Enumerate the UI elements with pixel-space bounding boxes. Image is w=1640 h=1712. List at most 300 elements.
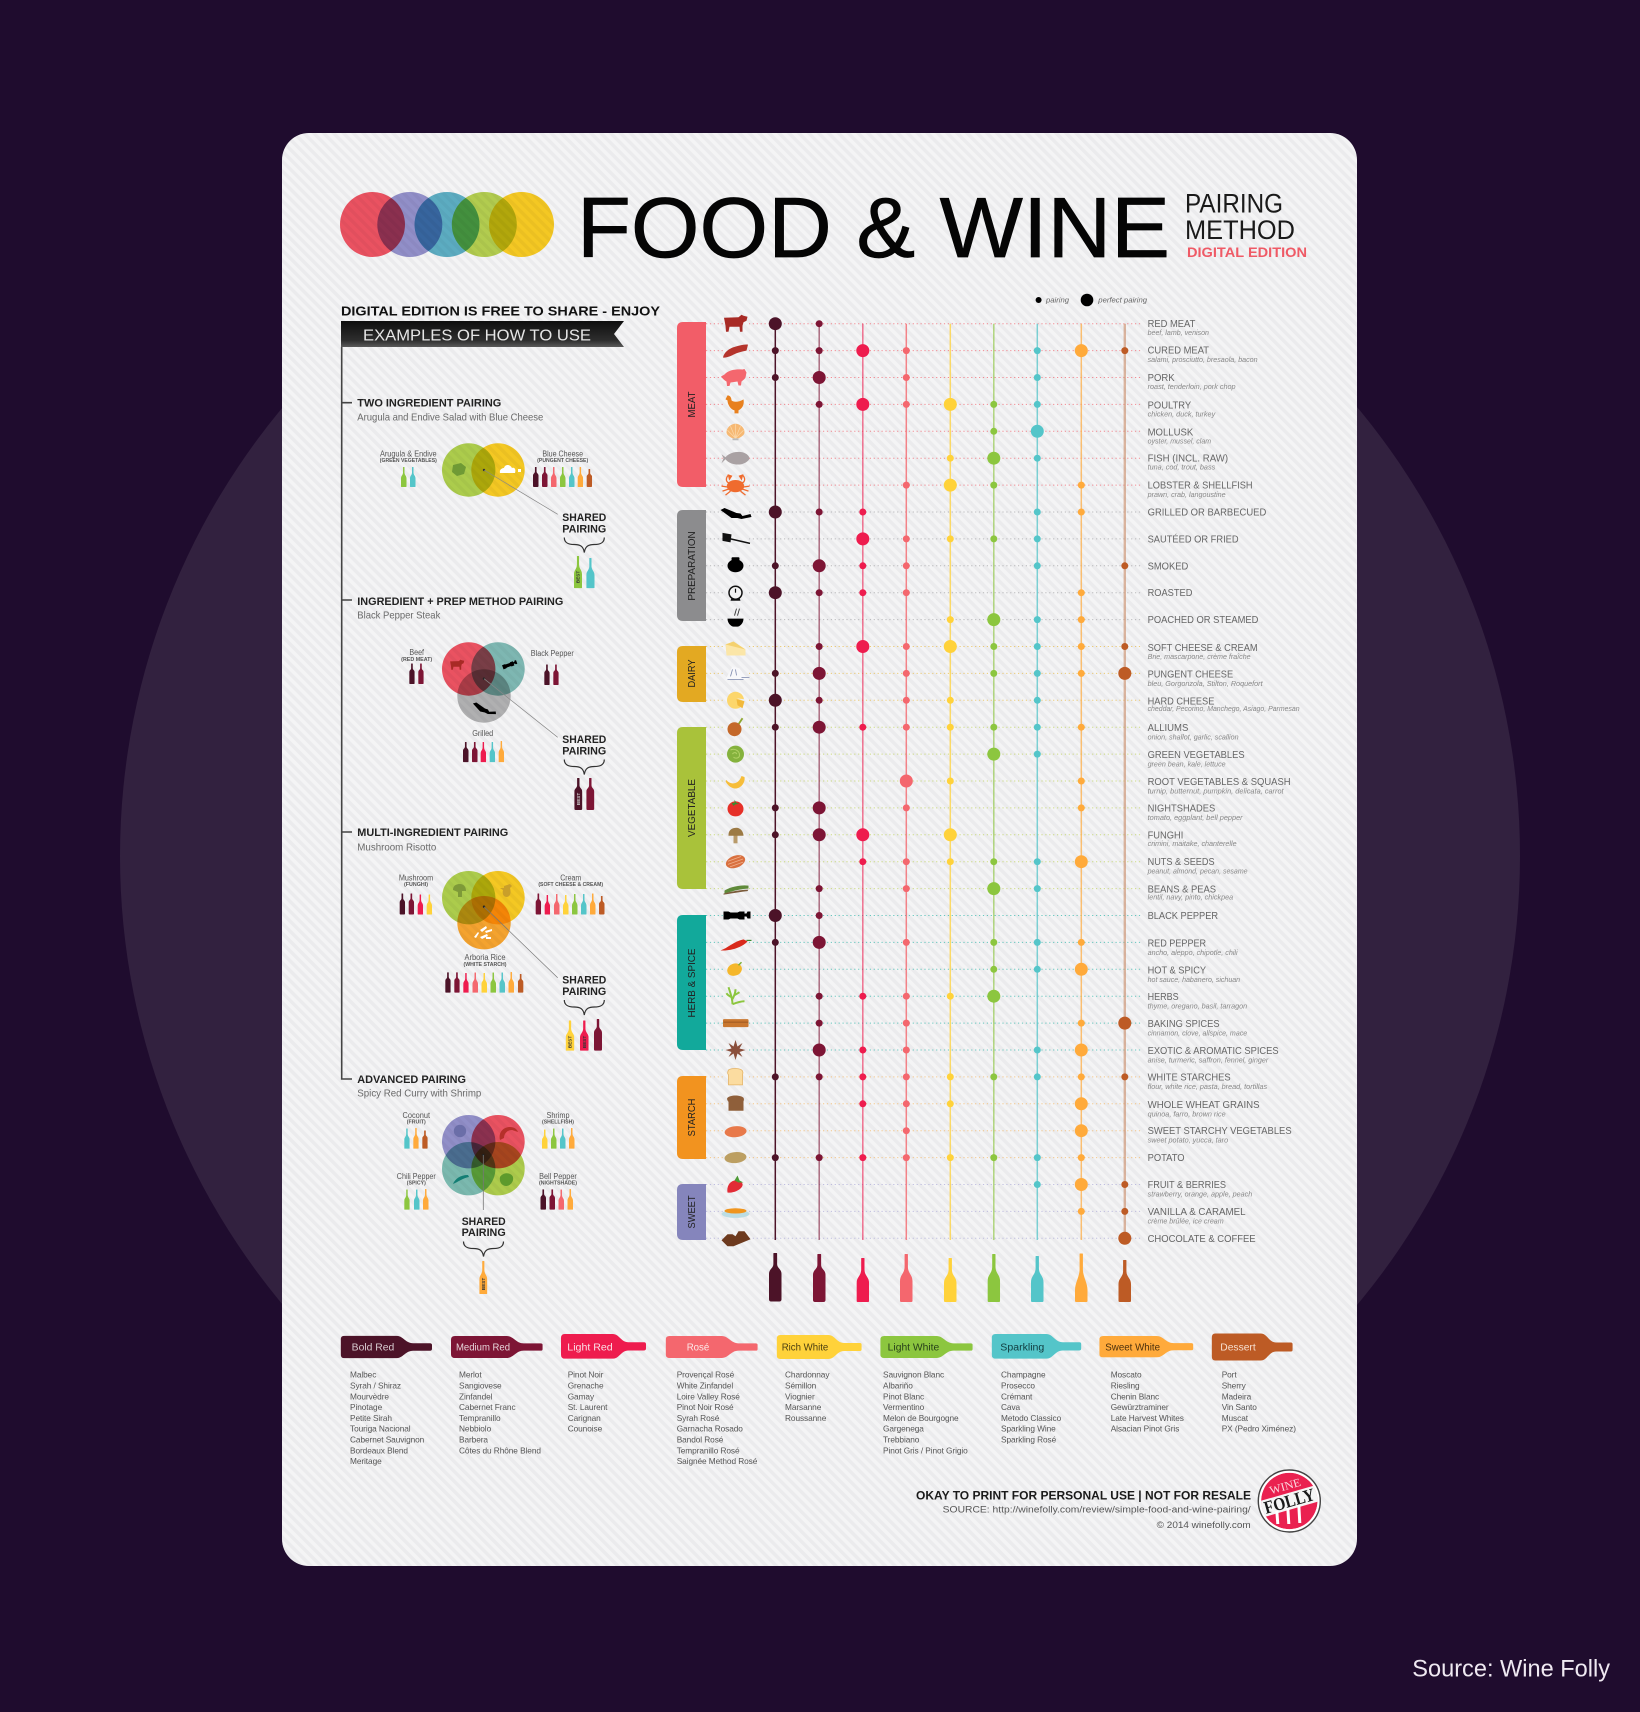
label: herbs (1148, 992, 1247, 1011)
label: coconut: (FRUIT) (407, 1119, 426, 1125)
wine: light red: Light Red (567, 1343, 613, 1354)
label: mushroom (399, 874, 433, 914)
category tab: preparation (677, 510, 706, 621)
category tab: vegetable: VEGETABLE (686, 779, 698, 837)
wine: medium red: Nebbiolo (459, 1424, 492, 1434)
label: cream: Cream (560, 874, 581, 882)
icon: shell (726, 424, 744, 440)
label: hard cheese: cheddar, Pecorino, Manchego, Asiago, Parmesan (1148, 704, 1300, 713)
wine: light red: Counoise (568, 1424, 603, 1434)
wine: medium red: Zinfandel (459, 1391, 493, 1401)
label: lobster and shellfish (1147, 481, 1253, 499)
subtitle: PAIRING (1185, 189, 1283, 219)
wine: rosé: Garnacha Rosado (677, 1424, 743, 1434)
label: chocolate and coffee: CHOCOLATE & COFFEE (1148, 1234, 1256, 1245)
icon: bean pod (724, 885, 748, 895)
shared pairing result: SHARED (562, 974, 607, 986)
wine: sweet white: Alsacian Pinot Gris (1111, 1424, 1179, 1434)
footer text: © 2014 winefolly.com (1157, 1520, 1251, 1531)
category tab: herb and spice (677, 915, 706, 1050)
label: nuts and seeds: peanut, almond, pecan, sesame (1147, 867, 1248, 876)
label: mushroom: (FUNGHI) (404, 882, 428, 888)
label: vanilla and caramel: crème brûlée, ice cream (1148, 1216, 1224, 1225)
wine: bold red: Bordeaux Blend (350, 1445, 408, 1455)
wine: rosé: Rosé (687, 1343, 710, 1354)
wine: rich white: Chardonnay (785, 1370, 830, 1380)
icon: timer (729, 586, 742, 601)
wine: light white: Trebbiano (883, 1434, 920, 1444)
label: chili pepper: (SPICY) (407, 1180, 426, 1186)
wine: light red: Pinot Noir (568, 1370, 604, 1380)
shared pairing result (562, 974, 607, 1051)
label: hot and spicy: HOT & SPICY (1148, 965, 1207, 976)
example: two ingredient pairing (357, 398, 607, 588)
label: sweet starchy vegetables (1148, 1126, 1292, 1145)
wine: rich white: Viognier (785, 1391, 815, 1401)
wine: rosé: Saignée Method Rosé (677, 1456, 758, 1466)
source credit: Source: Wine Folly (1412, 1656, 1610, 1683)
label: sautéed or fried: SAUTÉED OR FRIED (1148, 534, 1239, 545)
wine: bold red: Meritage (350, 1456, 382, 1466)
label: coconut (403, 1111, 431, 1149)
label: beans and peas: lentil, navy, pinto, chickpea (1148, 893, 1233, 902)
label: pungent cheese: bleu, Gorgonzola, Stilton, Roquefort (1148, 679, 1264, 688)
panel: poster card (282, 133, 1357, 1566)
wine: rosé: White Zinfandel (677, 1380, 733, 1390)
heading: ingredient and prep: Black Pepper Steak (357, 611, 441, 622)
label: poultry: chicken, duck, turkey (1148, 409, 1216, 418)
label: herbs: HERBS (1148, 992, 1179, 1003)
notice heading: DIGITAL EDITION IS FREE TO SHARE - ENJOY (341, 304, 660, 318)
icon: herbs (726, 987, 744, 1004)
heading: advanced (357, 1074, 481, 1100)
wine: light red: St. Laurent (568, 1402, 608, 1412)
heading: multi-ingredient: Mushroom Risotto (357, 842, 437, 853)
icon: grill (720, 508, 752, 519)
label: fruit and berries: strawberry, orange, apple, peach (1148, 1190, 1252, 1198)
shared pairing result (562, 512, 607, 588)
icon: spatula (722, 533, 750, 543)
subtitle: DIGITAL EDITION (1187, 244, 1307, 260)
label: arboria rice: (WHITE STARCH) (464, 962, 507, 968)
label: hard cheese: HARD CHEESE (1148, 696, 1215, 707)
wine: light white: Gargenega (883, 1424, 924, 1434)
label: red meat (1148, 319, 1209, 337)
label: poached or steamed: POACHED OR STEAMED (1148, 615, 1258, 626)
label: bell pepper: Bell Pepper (539, 1172, 577, 1181)
label: arugula and endive: Arugula & Endive (380, 450, 437, 458)
label: pungent cheese (1148, 669, 1264, 688)
shared pairing result: SHARED (562, 734, 607, 746)
wine: medium red: Sangiovese (459, 1380, 502, 1390)
wine: medium red: Merlot (459, 1370, 482, 1380)
label: blue cheese: (PUNGENT CHEESE) (537, 458, 589, 464)
column: dessert (1118, 324, 1131, 1245)
label: sweet starchy vegetables: sweet potato, yucca, taro (1148, 1136, 1228, 1145)
wine: dessert: PX (Pedro Ximénez) (1222, 1424, 1296, 1434)
wine: rich white (777, 1335, 862, 1423)
label: lobster and shellfish: LOBSTER & SHELLFISH (1148, 481, 1253, 492)
label: poultry: POULTRY (1148, 400, 1192, 411)
wine: rich white: Marsanne (785, 1402, 822, 1412)
wine: bold red (341, 1336, 432, 1466)
label: red pepper: RED PEPPER (1148, 938, 1206, 949)
category tab: starch (677, 1076, 706, 1159)
subtitle (1185, 189, 1307, 260)
label: mollusk: oyster, mussel, clam (1148, 436, 1211, 445)
label: roasted: ROASTED (1148, 588, 1192, 599)
venn diagram: two circles (442, 443, 558, 514)
category tab: sweet: SWEET (686, 1195, 698, 1228)
wine bottles under columns (769, 1253, 1131, 1302)
subtitle: METHOD (1185, 215, 1295, 245)
wine: rosé: Bandol Rosé (677, 1434, 724, 1444)
label: bell pepper: (NIGHTSHADE) (539, 1180, 577, 1186)
example: advanced pairing (357, 1074, 577, 1294)
wine: sparkling: Cava (1001, 1402, 1021, 1412)
wine: rich white: Rich White (782, 1343, 829, 1354)
label: cream: (SOFT CHEESE & CREAM) (538, 882, 603, 888)
label: beans and peas: BEANS & PEAS (1148, 885, 1217, 896)
label: exotic and aromatic spices (1148, 1046, 1279, 1064)
wine: bold red: Malbec (350, 1370, 376, 1380)
food icons (720, 315, 752, 1246)
heading: two ingredient pairing: TWO INGREDIENT PAIRING (357, 398, 501, 410)
label: nuts and seeds: NUTS & SEEDS (1148, 857, 1215, 868)
label: root vegetables and squash: turnip, butternut, pumpkin, delicata, carrot (1148, 786, 1285, 796)
icon: hard cheese (727, 692, 744, 709)
label: mollusk (1148, 427, 1211, 445)
label: beans and peas (1148, 885, 1233, 902)
icon: bread (728, 1069, 743, 1085)
label: mushroom: Mushroom (399, 874, 433, 882)
label: exotic and aromatic spices: EXOTIC & AROMATIC SPICES (1148, 1046, 1279, 1057)
label: vanilla and caramel (1148, 1207, 1246, 1225)
category tab: dairy: DAIRY (686, 660, 698, 688)
shared pairing result: BEST (568, 1036, 573, 1048)
label: whole wheat grains: quinoa, farro, brown rice (1148, 1109, 1226, 1118)
label: blue cheese: Blue Cheese (542, 450, 584, 458)
chart legend (1036, 294, 1148, 306)
wine: rosé: Tempranillo Rosé (677, 1445, 740, 1455)
wine: rosé (666, 1336, 758, 1466)
label: pork: roast, tenderloin, pork chop (1148, 382, 1236, 391)
icon: red chili (720, 939, 752, 951)
venn diagram: four circles (442, 1115, 525, 1210)
icon: soft cheese (726, 642, 746, 656)
heading: two ingredient pairing: Arugula and Endive Salad with Blue Cheese (357, 412, 544, 423)
label: shrimp (542, 1111, 574, 1149)
icon: cow (724, 315, 748, 332)
icon: bacon (723, 345, 748, 358)
heading: ingredient and prep: INGREDIENT + PREP METHOD PAIRING (357, 596, 563, 608)
wine: light white (880, 1336, 973, 1455)
category tab: starch: STARCH (686, 1099, 698, 1136)
label: beef (401, 648, 433, 684)
label: poultry (1148, 400, 1216, 418)
wine: bold red: Pinotage (350, 1402, 383, 1412)
wine: sweet white: Moscato (1111, 1370, 1142, 1380)
wine: sweet white: Chenin Blanc (1111, 1391, 1159, 1401)
label: green vegetables (1148, 750, 1245, 769)
icon: crab (722, 475, 750, 495)
venn diagram: three circles (442, 871, 558, 978)
label: baking spices (1148, 1019, 1247, 1038)
shared pairing result: PAIRING (562, 524, 606, 536)
label: alliums: onion, shallot, garlic, scallion (1148, 733, 1239, 742)
wine: dessert: Muscat (1222, 1413, 1249, 1423)
wine: light red (561, 1334, 646, 1434)
example: multi-ingredient pairing (357, 827, 607, 1051)
label: nightshades (1148, 803, 1243, 822)
label: pungent cheese: PUNGENT CHEESE (1148, 669, 1234, 680)
label: nightshades: tomato, eggplant, bell pepper (1148, 813, 1243, 822)
label: pork: PORK (1148, 373, 1175, 384)
footer text (916, 1490, 1251, 1531)
chart legend: perfect pairing (1097, 296, 1148, 304)
wine: sparkling: Prosecco (1001, 1380, 1035, 1390)
icon: pig (721, 369, 746, 386)
category tab: sweet (677, 1184, 706, 1240)
icon: green cabbage (727, 746, 744, 763)
column: rich white (944, 324, 957, 1240)
row labels (1147, 319, 1300, 1245)
wine: medium red: Tempranillo (459, 1413, 501, 1423)
column: medium red (813, 320, 826, 1240)
icon: sweet potato (724, 1125, 747, 1138)
wine: sparkling: Sparkling (1000, 1343, 1044, 1354)
wine: sparkling: Crémant (1001, 1391, 1033, 1401)
label: cured meat: salami, prosciutto, bresaola, bacon (1148, 355, 1258, 364)
wine: light white: Light White (888, 1343, 940, 1354)
column: rosé (900, 324, 913, 1240)
category tab: herb and spice: HERB & SPICE (686, 948, 698, 1018)
label: beef: (RED MEAT) (401, 657, 433, 663)
label: red pepper: ancho, aleppo, chipotle, chili (1148, 948, 1238, 957)
wine: sparkling: Sparkling Wine (1001, 1424, 1056, 1434)
label: root vegetables and squash (1148, 777, 1291, 796)
label: alliums: ALLIUMS (1148, 723, 1189, 734)
title logo circles (340, 192, 554, 257)
logo: wine folly (1253, 1470, 1325, 1532)
label: soft cheese and cream (1148, 643, 1258, 661)
category tab: dairy (677, 646, 706, 702)
icon: chocolate (722, 1231, 750, 1246)
wine: light white: Sauvignon Blanc (883, 1370, 944, 1380)
label: grilled or barbecued: GRILLED OR BARBECUED (1148, 508, 1266, 518)
label: whole wheat grains (1148, 1100, 1260, 1118)
chart: food and wine pairing matrix (677, 310, 1300, 1302)
wine: bold red: Syrah / Shiraz (350, 1380, 401, 1390)
wine: rosé: Loire Valley Rosé (677, 1391, 740, 1401)
label: sweet starchy vegetables: SWEET STARCHY VEGETABLES (1148, 1126, 1292, 1137)
logo: wine folly: FOLLY (1262, 1484, 1317, 1518)
label: fish (1148, 454, 1228, 472)
shared pairing result: SHARED (462, 1216, 506, 1228)
wine: light red: Grenache (568, 1380, 604, 1390)
label: arboria rice (445, 953, 523, 993)
wine: rosé: Syrah Rosé (677, 1413, 720, 1423)
column: light white (987, 324, 1000, 1240)
wine: medium red: Barbera (459, 1434, 488, 1444)
label: arugula and endive: (GREEN VEGETABLES) (380, 458, 437, 464)
icon: squash (726, 776, 745, 789)
label: grilled (463, 729, 504, 762)
icon: fish (722, 452, 750, 465)
examples timeline bracket (342, 347, 352, 1079)
logo: wine folly: WINE (1268, 1477, 1302, 1497)
wine: medium red: Côtes du Rhône Blend (459, 1445, 541, 1455)
wine: medium red (451, 1336, 543, 1455)
label: hot and spicy: hot sauce, habanero, sichuan (1148, 975, 1240, 984)
heading: advanced: Spicy Red Curry with Shrimp (357, 1089, 481, 1100)
wine: sparkling: Sparkling Rosé (1001, 1434, 1057, 1444)
label: baking spices: cinnamon, clove, allspice, mace (1148, 1029, 1247, 1038)
wine: sweet white: Gewürztraminer (1111, 1402, 1169, 1412)
wine: dessert: Madeira (1222, 1391, 1252, 1401)
label: green vegetables: GREEN VEGETABLES (1148, 750, 1245, 761)
shared pairing result: PAIRING (562, 986, 606, 998)
label: shrimp: Shrimp (546, 1111, 570, 1120)
shared pairing result: BEST (576, 793, 581, 805)
label: black pepper (531, 649, 574, 685)
category tab: meat (677, 322, 706, 487)
icon: pecan (724, 853, 747, 871)
label: white starches (1148, 1072, 1268, 1091)
label: whole wheat grains: WHOLE WHEAT GRAINS (1148, 1100, 1260, 1111)
wine: dessert (1212, 1334, 1296, 1434)
label: nuts and seeds (1147, 857, 1248, 876)
label: red meat: beef, lamb, venison (1148, 328, 1209, 337)
banner: examples of how to use (341, 321, 624, 347)
label: soft cheese and cream: Brie, mascarpone, crème fraîche (1148, 652, 1251, 661)
icon: cinnamon (723, 1019, 748, 1027)
label: white starches: WHITE STARCHES (1148, 1072, 1231, 1083)
venn diagram: three circles (442, 642, 558, 737)
category tab: preparation: PREPARATION (686, 531, 698, 601)
wine: dessert: Sherry (1222, 1380, 1247, 1390)
label: alliums (1148, 723, 1239, 742)
icon: onion (728, 718, 742, 736)
label: blue cheese (533, 450, 592, 487)
label: mollusk: MOLLUSK (1148, 427, 1194, 438)
wine: light red: Gamay (568, 1391, 595, 1401)
label: funghi: crimini, maitake, chanterelle (1148, 839, 1237, 848)
label: fish: FISH (INCL. RAW) (1148, 454, 1228, 465)
icon: potato (724, 1151, 747, 1164)
title: FOOD & WINE (577, 181, 1170, 276)
label: green vegetables: green bean, kale, lettuce (1148, 760, 1226, 769)
wine: dessert: Dessert (1220, 1343, 1256, 1354)
background circle (120, 156, 1520, 1556)
column: bold red (769, 317, 782, 1240)
example: ingredient + prep method pairing (357, 596, 607, 810)
wine: sweet white: Late Harvest Whites (1111, 1413, 1184, 1423)
shared pairing result: PAIRING (562, 746, 606, 758)
shared pairing result (562, 734, 607, 810)
footer text: OKAY TO PRINT FOR PERSONAL USE | NOT FOR RESALE (916, 1490, 1251, 1502)
shared pairing result: SHARED (562, 512, 607, 524)
label: pork (1148, 373, 1236, 391)
wine: light white: Melon de Bourgogne (883, 1413, 959, 1423)
category tab: vegetable (677, 727, 706, 889)
column: sparkling (1031, 324, 1044, 1240)
shared pairing result: BEST (481, 1278, 486, 1290)
wine: sparkling: Champagne (1001, 1370, 1046, 1380)
icon: hot pepper (725, 961, 744, 978)
label: black pepper: BLACK PEPPER (1148, 911, 1218, 922)
wine: light white: Pinot Blanc (883, 1391, 924, 1401)
column: light red (856, 324, 869, 1240)
icon: smoker pot (728, 557, 744, 572)
wine: rich white: Roussanne (785, 1413, 827, 1423)
category tab: meat: MEAT (686, 391, 698, 418)
label: white starches: flour, white rice, pasta, bread, tortillas (1148, 1082, 1268, 1091)
label: herbs: thyme, oregano, basil, tarragon (1148, 1002, 1247, 1011)
wine: light white: Albariño (883, 1380, 913, 1390)
label: potato: POTATO (1148, 1153, 1185, 1164)
wine: sparkling: Metodo Classico (1001, 1413, 1062, 1423)
label: funghi: FUNGHI (1148, 830, 1183, 841)
shared pairing result: BEST (576, 571, 581, 583)
wine: rosé: Provençal Rosé (677, 1370, 735, 1380)
wine: light white: Pinot Gris / Pinot Grigio (883, 1445, 968, 1455)
wine: rich white: Sémillon (785, 1380, 817, 1390)
wine: sweet white: Riesling (1111, 1380, 1140, 1390)
wine: rosé: Pinot Noir Rosé (677, 1402, 734, 1412)
label: chili pepper: Chili Pepper (397, 1172, 436, 1181)
label: cured meat (1148, 346, 1258, 364)
wine: light red: Carignan (568, 1413, 601, 1423)
icon: pungent cheese (726, 666, 752, 679)
label: chili pepper (397, 1172, 436, 1210)
wine: medium red: Medium Red (456, 1343, 510, 1354)
icon: wheat bread (727, 1096, 744, 1111)
column: sweet white (1075, 324, 1088, 1240)
label: exotic and aromatic spices: anise, turmeric, saffron, fennel, ginger (1148, 1056, 1269, 1064)
label: cured meat: CURED MEAT (1148, 346, 1209, 357)
banner: examples of how to use: EXAMPLES OF HOW TO USE (363, 328, 591, 344)
label: root vegetables and squash: ROOT VEGETABLES & SQUASH (1148, 777, 1291, 788)
label: shrimp: (SHELLFISH) (542, 1119, 574, 1125)
label: fruit and berries (1148, 1180, 1252, 1198)
icon: tomato (728, 800, 744, 816)
label: grilled: Grilled (472, 729, 493, 738)
wine: medium red: Cabernet Franc (459, 1402, 516, 1412)
icon: steam bowl (728, 609, 744, 627)
label: hard cheese (1148, 696, 1300, 713)
label: vanilla and caramel: VANILLA & CARAMEL (1148, 1207, 1246, 1218)
icon: pepper mill (724, 912, 750, 920)
heading: multi-ingredient (357, 827, 508, 853)
icon: star anise (726, 1040, 746, 1060)
shared pairing result (462, 1216, 506, 1294)
footer text: SOURCE: http://winefolly.com/review/simple-food-and-wine-pairing/ (943, 1504, 1251, 1516)
heading: multi-ingredient: MULTI-INGREDIENT PAIRING (357, 827, 508, 839)
label: red pepper (1148, 938, 1238, 957)
wine: light white: Vermentino (883, 1402, 925, 1412)
label: fish: tuna, cod, trout, bass (1148, 463, 1216, 472)
wine: bold red: Petite Sirah (350, 1413, 392, 1423)
label: soft cheese and cream: SOFT CHEESE & CREAM (1148, 643, 1258, 654)
icon: chicken (726, 395, 744, 413)
wine: sparkling (992, 1334, 1081, 1444)
label: lobster and shellfish: prawn, crab, langoustine (1147, 490, 1226, 499)
wine: bold red: Cabernet Sauvignon (350, 1434, 425, 1444)
label: funghi (1148, 830, 1237, 848)
shared pairing result: BEST (582, 1036, 587, 1048)
label: beef: Beef (409, 648, 425, 657)
